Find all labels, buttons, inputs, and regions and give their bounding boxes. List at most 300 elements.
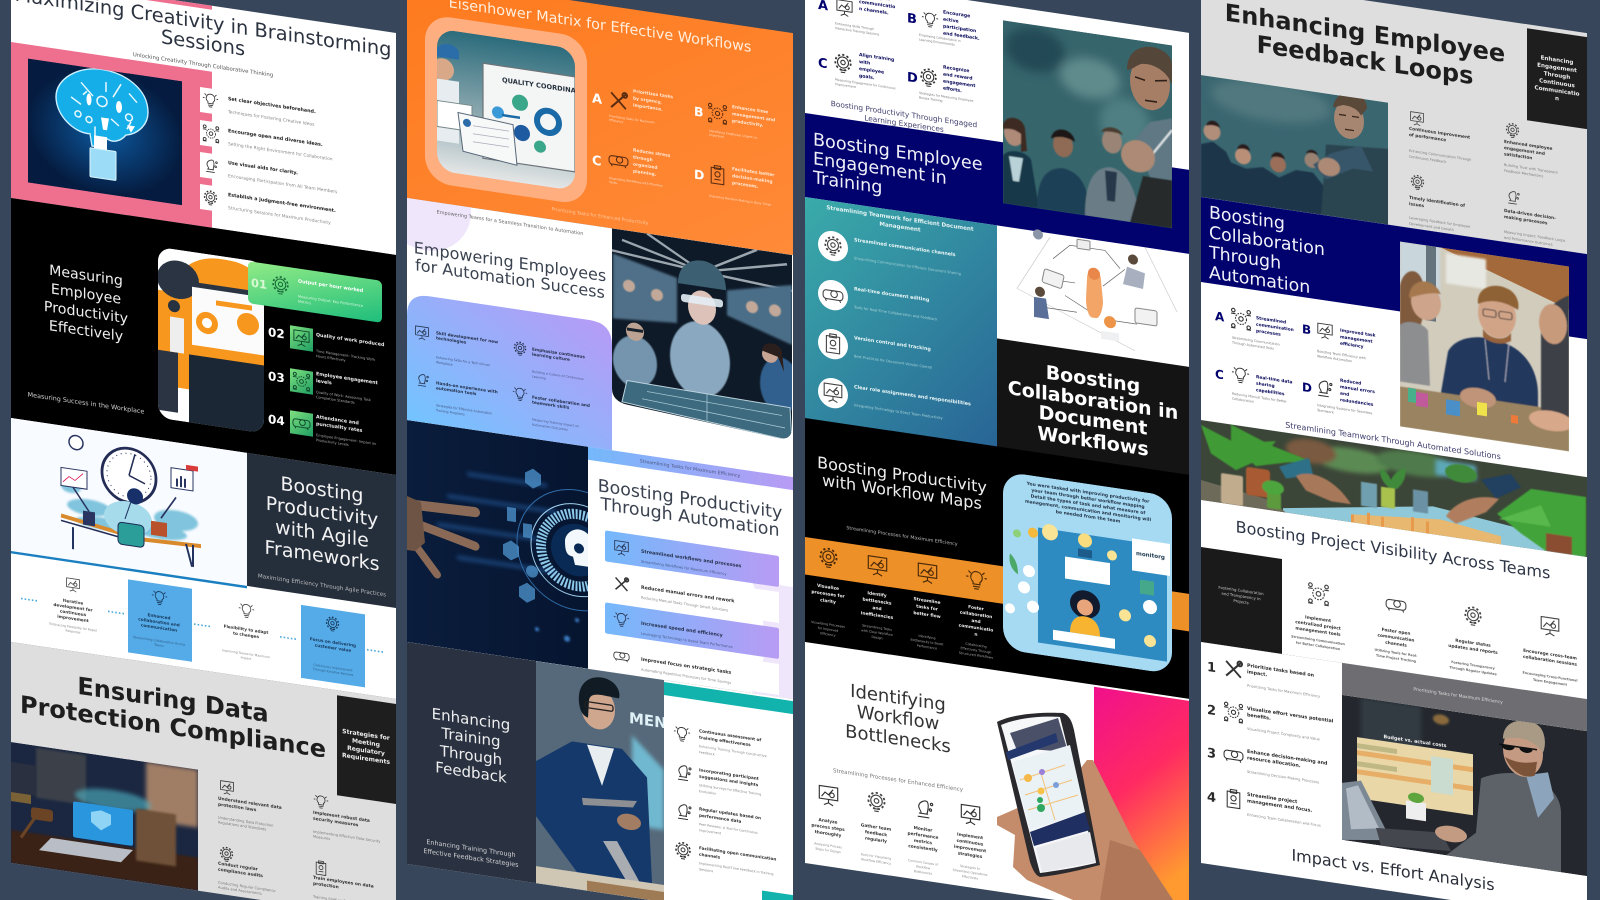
item 4: Implementing Real-Time Feedback in Training xyxy=(699,861,773,876)
item A: communication xyxy=(1256,322,1294,333)
column 2: Utilizing Tools for Real- xyxy=(1375,648,1418,658)
item 4: Integrating Technology to Boost Team Productivity xyxy=(854,403,943,420)
item A: importance. xyxy=(633,102,663,113)
item 02: Hours Effectively xyxy=(316,354,346,363)
title: Through xyxy=(1208,243,1281,274)
item: Timely identification: Timely identification of xyxy=(1409,195,1465,209)
continuous learning item: Learning xyxy=(532,375,546,381)
item A: A xyxy=(1215,309,1225,325)
teal top band xyxy=(664,682,793,714)
dark label box: Strategies for xyxy=(342,728,390,742)
item A: Prioritizes tasks xyxy=(633,88,673,100)
item: Continuous improvement: Continuous improvement xyxy=(1409,126,1470,141)
item C: with xyxy=(859,59,870,67)
item 2: Real-time document editing xyxy=(854,286,930,303)
item A: Streamlined xyxy=(1256,315,1286,326)
photo: plants and hands over map xyxy=(1201,420,1587,558)
column 1 xyxy=(1291,580,1345,652)
item C: organized xyxy=(633,161,658,171)
item D: Improving Decision-Making in Busy Times xyxy=(709,194,772,207)
slide: Impact vs. Effort Analysis xyxy=(1201,642,1587,900)
column 4: Implement xyxy=(957,832,983,841)
illustration: blue workflow map: monitorg xyxy=(1136,551,1165,561)
item D: efforts. xyxy=(943,85,962,94)
dark label box: Regulatory xyxy=(347,745,385,757)
item 2: benefits. xyxy=(1247,712,1271,722)
item: Implement security: security measures xyxy=(313,816,359,828)
title: Through Automation xyxy=(600,495,779,541)
title: Bottlenecks xyxy=(845,721,951,758)
item 3: Version control and tracking xyxy=(854,335,931,353)
slide: Boosting Collaboration Through Automation xyxy=(1201,197,1587,477)
item 3: Use visual aids: Encouraging Participation from All Team Members xyxy=(228,173,338,195)
column 1: Analyze xyxy=(819,817,838,826)
card 1: Iterative development: Response xyxy=(66,628,81,635)
photo: team around table xyxy=(1400,242,1569,452)
title: Enhancing xyxy=(432,705,510,734)
item C: Measuring Engagement for Continuous xyxy=(835,77,896,90)
row 4: Automating Repetitive Processes for Time Savings xyxy=(641,668,731,685)
column 2: and xyxy=(872,605,882,612)
slide: Boosting Productivity with Workflow Maps xyxy=(805,418,1189,699)
column 4: communicatio xyxy=(959,623,993,634)
item C: C xyxy=(1215,367,1224,382)
column 4: collaboration sessions xyxy=(1523,654,1577,668)
item 04: punctuality rates xyxy=(316,421,362,434)
item: Train employees: Train employees on data xyxy=(313,875,374,890)
row 4 xyxy=(605,638,779,695)
column 3: Fostering Transparency xyxy=(1451,660,1496,671)
column 2: communication xyxy=(1378,632,1414,644)
slide: Boosting Productivity with Agile Frameworks xyxy=(11,418,396,699)
item 4: Sessions xyxy=(699,867,713,873)
item 1: 1 xyxy=(1207,660,1216,676)
item B xyxy=(1302,321,1377,367)
item D: processes. xyxy=(732,180,759,190)
collaboration item xyxy=(513,387,590,435)
item C: goals. xyxy=(859,73,875,81)
item 02: 02 xyxy=(268,325,285,341)
item 3 xyxy=(1207,743,1328,786)
subtitle: Streamlining Processes for Enhanced Efficiency xyxy=(833,768,964,793)
dark label box: and Transparency in xyxy=(1221,591,1261,601)
item: Data-driven decisions: making processes xyxy=(1504,214,1548,227)
title: Employee xyxy=(51,281,121,308)
item B xyxy=(694,98,775,146)
footer text: Effective Feedback Strategies xyxy=(424,847,519,869)
item 3 xyxy=(678,803,761,841)
row 1: Streamlined workflows and processes xyxy=(641,549,741,569)
item B: efficiency xyxy=(1340,341,1364,350)
card 2: Enhanced collaboration: Teams xyxy=(153,642,164,648)
item A: Prioritizing Tasks for Maximum xyxy=(609,114,655,125)
dark label box xyxy=(1201,547,1282,654)
item C: Reduces stress xyxy=(633,147,671,159)
image: glowing brain xyxy=(28,58,182,206)
column 2: regularly xyxy=(865,836,887,845)
subtitle: Streamlining Teamwork for Efficient Document xyxy=(826,205,974,233)
item C: C xyxy=(818,56,828,72)
item 1: Streamlined communication channels xyxy=(854,237,956,258)
column 4: Collaborating xyxy=(965,642,987,649)
column 3 xyxy=(1448,604,1498,677)
card 4: Focus on customer value: Continuous Improvement xyxy=(313,663,353,673)
item: Understand laws: Regulations and Standards xyxy=(218,820,266,832)
column 3: performance xyxy=(908,830,939,841)
slide: Measuring Employee Productivity Effectively xyxy=(11,198,396,477)
title: Workflows xyxy=(1037,421,1149,461)
column 3: Performance xyxy=(917,644,937,651)
item 3: performance data xyxy=(699,813,742,824)
item C: Organizing Workflows with Priorities xyxy=(609,176,663,188)
item: Timely identification: Development and Growth xyxy=(1409,222,1454,232)
item 3: Streamlining Decision-Making Processes xyxy=(1247,770,1319,785)
item: Data-driven decisions: Data-driven decision- xyxy=(1504,208,1556,222)
column 2 xyxy=(861,555,894,642)
photo: woman with visor at holographic table xyxy=(612,228,800,442)
dark label box: Through xyxy=(1544,71,1570,81)
item 4: Facilitating open communication xyxy=(699,845,776,862)
item 02: Time Management: Tracking Work xyxy=(315,349,376,362)
item 4: Enhancing Team Collaboration and Focus xyxy=(1247,813,1321,828)
photo: businesswoman with tablet: MEN xyxy=(629,709,667,732)
title: Boosting xyxy=(1046,361,1140,398)
gradient panel with four items xyxy=(407,293,612,451)
item B: management and xyxy=(732,111,775,123)
grey band: Prioritizing Tasks for Maximum Efficiency xyxy=(1413,686,1503,706)
column 2: Gather team xyxy=(861,822,892,833)
card 1: Iterative development: Embracing Flexibility for Rapid xyxy=(49,622,97,633)
column 2 xyxy=(1375,597,1418,664)
photo: laptop with shield and books xyxy=(11,742,198,891)
item C: capabilities xyxy=(1256,387,1285,397)
subtitle: Maximizing Efficiency Through Agile Practices xyxy=(258,574,386,599)
item 04 xyxy=(268,407,376,451)
column 1: Visualizing Processes xyxy=(811,620,845,629)
column 4 xyxy=(959,569,993,660)
title: with Workflow Maps xyxy=(822,471,982,513)
item A: processes xyxy=(1256,328,1281,338)
footer text: Enhancing Training Through xyxy=(426,838,516,859)
title: Identifying xyxy=(850,681,946,716)
item C: planning. xyxy=(633,168,657,178)
column 4: Foster xyxy=(968,604,985,613)
dark label box: Engagement xyxy=(1537,62,1577,74)
item: Timely identification xyxy=(1409,174,1470,235)
slide: Boosting Collaboration in Document Workflows xyxy=(805,195,1189,476)
column 4: Effectively Through xyxy=(961,646,991,655)
item 03: Completion Standards xyxy=(316,395,355,405)
hands-on item: Strategies for Effective Automation xyxy=(436,403,492,416)
column 3: Identifying xyxy=(919,634,935,640)
item B: Improved task xyxy=(1340,328,1377,339)
title: Training xyxy=(440,724,501,751)
title: Productivity xyxy=(44,299,129,327)
photo: hand touching AI interface xyxy=(407,420,588,669)
item C: employee xyxy=(859,66,884,76)
row 3 xyxy=(605,602,779,659)
title: Boosting Productivity xyxy=(817,453,987,497)
item B: Learning Environments xyxy=(919,37,955,47)
title: Feedback xyxy=(435,758,507,787)
item 1: Prioritizing Tasks for Maximum Efficiency xyxy=(1247,684,1321,699)
item 03 xyxy=(268,364,378,408)
column 2: Foster open xyxy=(1382,627,1410,637)
illustration: blue workflow map: management, communication and monitoring will xyxy=(1025,499,1151,523)
title: Collaboration xyxy=(1209,223,1325,260)
dark label box: Enhancing xyxy=(1541,55,1573,66)
column 4: Strategies to xyxy=(960,864,980,871)
item 3: Best Practices for Document Version Control xyxy=(854,354,932,370)
item: Enhanced engagement: engagement and xyxy=(1504,145,1545,157)
item C: Reducing Manual Tasks for Better xyxy=(1232,392,1287,404)
item C: Tasks xyxy=(608,180,617,185)
item C: Collaboration xyxy=(1232,397,1254,404)
column 3: Through Regular Updates xyxy=(1449,665,1497,676)
column 3 xyxy=(911,562,944,652)
card 4: Focus on customer value xyxy=(301,605,365,687)
item B: participation xyxy=(943,23,976,34)
column 3: Common Causes of xyxy=(908,858,939,867)
item B xyxy=(907,4,980,50)
row 1: Streamlining Workflows for Maximum Efficiency xyxy=(641,560,728,576)
item B: Employing Collaborative in xyxy=(919,33,961,43)
footer text: Measuring Success in the Workplace xyxy=(28,390,144,416)
item B: Enhances time xyxy=(732,104,768,115)
item: Understand laws: Understand relevant data xyxy=(218,796,282,811)
item D: and xyxy=(1340,391,1349,398)
dotted arrows xyxy=(21,598,385,652)
item: Timely identification: issues xyxy=(1409,201,1425,209)
column 4: continuous xyxy=(957,838,984,848)
title: for Automation Success xyxy=(415,255,605,302)
framed photo: quality coordinator certificate: QUALITY COORDINATOR xyxy=(502,76,590,97)
photo: businesswoman with tablet xyxy=(536,661,667,900)
column 4: Streamline Operations xyxy=(953,868,988,877)
item 4: channels xyxy=(699,852,721,860)
item 1: Enhancing Training Through Constructive xyxy=(699,744,767,758)
item: Timely identification: Leveraging Feedback for Employee xyxy=(1409,216,1470,229)
column 2 xyxy=(860,790,892,866)
item D: decision-making xyxy=(732,173,772,185)
card 1: Iterative development xyxy=(49,575,97,637)
column 1 xyxy=(811,546,845,639)
column 4: improvement xyxy=(954,844,986,854)
card 1: Iterative development: continuous xyxy=(60,608,87,617)
item A: A xyxy=(592,91,603,108)
item B: and feedback. xyxy=(943,30,980,42)
item: Data-driven decisions: Measuring Impact: Feedback Loops xyxy=(1504,230,1566,243)
item D: redundancies xyxy=(1340,397,1374,408)
column 4: Structured Workflows xyxy=(959,651,993,660)
item 1: Streamlining Communication for Efficient Document Sharing xyxy=(854,256,961,276)
title: Boosting xyxy=(1209,203,1285,234)
column 1: for Better Collaboration xyxy=(1296,641,1341,651)
item 2: suggestions and insights xyxy=(699,774,759,787)
card 3: Flexibility: to changes xyxy=(233,630,259,639)
card 2: Enhanced collaboration: Enhanced xyxy=(148,612,170,621)
title: Workflow xyxy=(857,702,939,735)
item C xyxy=(1215,364,1292,410)
column 3: better flow xyxy=(913,610,941,620)
item: Conduct audits xyxy=(218,846,276,898)
item: Enhanced engagement: Feedback Mechanisms xyxy=(1504,169,1543,178)
item 1: Set clear objectives: Set clear objectives beforehand. xyxy=(228,96,316,115)
continuous learning item: Emphasize continuous xyxy=(532,347,585,359)
photo: man pointing with team xyxy=(1201,75,1388,224)
item A xyxy=(592,82,673,131)
hands-on item: Hands-on experience with xyxy=(436,380,498,394)
item D: Reduced xyxy=(1340,378,1361,387)
framed photo: quality coordinator certificate xyxy=(425,14,590,206)
column 2: Design xyxy=(871,635,883,640)
title: Boosting Productivity xyxy=(598,476,782,524)
column 3: consistently xyxy=(908,843,938,854)
item A: Interactive Training Sessions xyxy=(835,26,880,37)
column 2: Streamlining Tasks xyxy=(862,623,892,632)
item A xyxy=(1215,306,1294,354)
hands-on item xyxy=(418,374,498,421)
item D: engagement xyxy=(943,78,976,89)
title: Collaboration in xyxy=(1008,376,1178,424)
column 1: Steps for Design xyxy=(815,847,841,854)
item 1: Prioritize tasks based on xyxy=(1247,663,1315,679)
row 3: Leveraging Technology to Boost Team Performance xyxy=(641,632,734,649)
teal corner xyxy=(762,891,793,900)
item 3: Use visual aids: Use visual aids for clarity. xyxy=(228,160,298,176)
slide: Boosting Project Visibility Across Teams xyxy=(1201,420,1587,699)
item A: n channels. xyxy=(859,6,889,16)
dark label box: Continuous xyxy=(1539,78,1575,90)
item 3: Improvement xyxy=(699,828,722,836)
title: Document xyxy=(1039,401,1147,440)
column 2: bottlenecks xyxy=(862,597,892,607)
illustration: worker at board xyxy=(157,247,264,433)
slide: Identifying Workflow Bottlenecks xyxy=(805,642,1189,900)
card 1: Iterative development: development for xyxy=(53,602,94,613)
title: Training xyxy=(812,168,882,198)
item 1 xyxy=(674,725,767,764)
dark label box: Communicatio xyxy=(1534,85,1580,98)
title: Effectively xyxy=(49,318,124,345)
item 4: Establish judgment-free xyxy=(200,184,336,229)
item: Enhanced engagement xyxy=(1504,123,1558,181)
item: Understand laws xyxy=(218,780,282,834)
slide: Empowering Employees for Automation Success xyxy=(407,198,800,479)
dark label box: Projects xyxy=(1233,598,1249,605)
column 1: clarity xyxy=(820,597,836,606)
item B: B xyxy=(1302,322,1311,337)
item: Conduct audits: Conducting Regular Compliance xyxy=(218,881,276,893)
item 2 xyxy=(1207,699,1334,744)
item B: B xyxy=(694,104,704,120)
column 2 xyxy=(407,0,800,900)
title: Frameworks xyxy=(264,536,380,576)
item A xyxy=(818,0,895,39)
column 1: thoroughly xyxy=(815,829,841,839)
row 2: Reduced manual errors and rework xyxy=(641,585,735,605)
item: Enhanced engagement: Building Trust with Transparent xyxy=(1504,163,1558,175)
collaboration item: Foster collaboration and xyxy=(532,395,590,408)
title: Boosting Employee xyxy=(813,130,983,175)
item D: D xyxy=(1302,380,1312,395)
illustration: blue workflow map: Detail the types of task and what measure of xyxy=(1031,493,1145,516)
item 02: Quality of work produced xyxy=(316,332,385,348)
item 4: management and focus. xyxy=(1247,798,1312,814)
photo: man pointing, blurred team xyxy=(1003,20,1172,228)
skill development item: technologies xyxy=(436,335,467,345)
column 4 xyxy=(1201,0,1587,900)
item 1: Set clear objectives: Techniques for Fostering Creative Ideas xyxy=(227,109,315,128)
subtitle: Empowering Teams for a Seamless Transition to Automation xyxy=(437,209,583,237)
photo: man with laptop and budget table: Budget vs. actual costs xyxy=(1384,734,1447,749)
item C xyxy=(818,46,896,95)
card 01: Output per hour xyxy=(248,261,382,323)
item: Train employees xyxy=(312,860,374,900)
column 4 xyxy=(1522,614,1578,688)
row 2 xyxy=(605,566,779,623)
item 3 xyxy=(818,327,932,374)
card 3: Flexibility: Impact xyxy=(241,655,252,661)
column 1: for Improved xyxy=(818,626,838,633)
item A: Through Automated Tools xyxy=(1231,340,1274,351)
item 3: Use visual aids xyxy=(200,152,338,197)
item 03: 03 xyxy=(268,369,285,385)
column 2: Time Project Tracking xyxy=(1376,654,1417,664)
hands-on item: Training Programs xyxy=(435,408,465,417)
item B: B xyxy=(907,11,917,28)
column 4: collaboration xyxy=(960,610,992,620)
item: Continuous improvement xyxy=(1409,111,1471,168)
item 4: Clear role assignments and responsibilities xyxy=(854,384,971,408)
collaboration item: Automation Outcomes xyxy=(532,423,568,432)
column 1: centralized project xyxy=(1295,619,1341,632)
item 2: 2 xyxy=(1207,703,1216,719)
title: Protection Compliance xyxy=(20,690,326,764)
column 1 xyxy=(811,784,845,855)
footer text: Prioritizing Tasks for Enhanced Productivity xyxy=(552,206,649,227)
column 3: Streamline xyxy=(913,596,941,606)
item 4 xyxy=(676,842,776,883)
card 3: Flexibility xyxy=(222,601,270,664)
column 2: Identify xyxy=(867,590,887,599)
column 1: Visualize xyxy=(817,583,839,592)
row 4: Improved focus on strategic tasks xyxy=(641,657,731,676)
column 1 xyxy=(11,0,396,900)
subtitle: Boosting Productivity Through Engaged xyxy=(831,99,977,130)
item D: Recognize xyxy=(943,64,969,74)
item D xyxy=(694,160,775,208)
item 3: Peer Reviews: A Tool for Continuous xyxy=(699,822,758,835)
item D: Teamwork xyxy=(1316,408,1334,415)
item 2: Visualizing Project Complexity and Value xyxy=(1247,727,1321,742)
row 3: Increased speed and efficiency xyxy=(641,621,723,639)
item 4: 4 xyxy=(1207,790,1216,806)
item 4 xyxy=(1207,786,1321,828)
illustration: blue workflow map: be needed from the team xyxy=(1056,509,1121,525)
item C: Improvement xyxy=(835,82,857,89)
item D: manual errors xyxy=(1340,384,1375,395)
item 1: Set clear objectives xyxy=(200,87,316,129)
item: Conduct audits: Audits and Assessments xyxy=(218,885,262,896)
card 4: Focus on customer value: Focus on delivering xyxy=(310,636,356,648)
item 3: Regular updates based on xyxy=(699,806,761,820)
card 4: Focus on customer value: customer value xyxy=(315,643,351,653)
row 1 xyxy=(605,530,779,587)
column 4: Encourage cross-team xyxy=(1523,648,1577,662)
title: Engagement in xyxy=(813,149,947,189)
item 1: training effectiveness xyxy=(699,735,751,747)
